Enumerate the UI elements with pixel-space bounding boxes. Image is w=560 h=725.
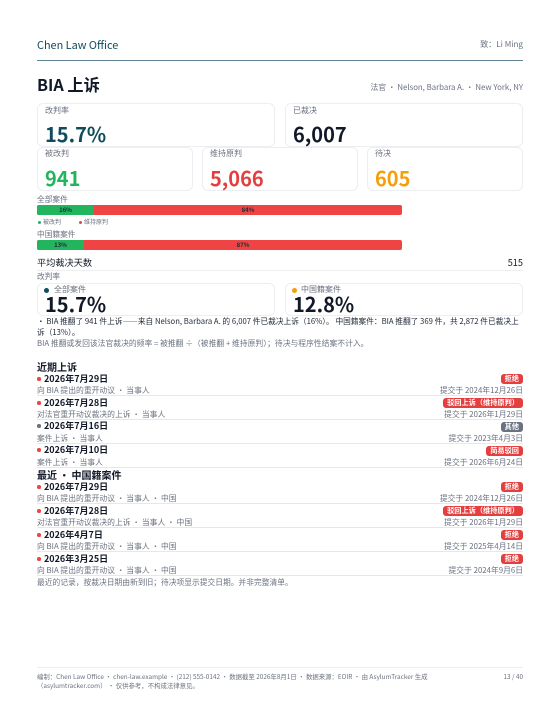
- average days row: 515: [508, 255, 523, 269]
- row: 提交于 2024年12月26日: [440, 493, 523, 504]
- row: 2026年7月10日: [44, 443, 108, 456]
- row: 拒绝: [505, 554, 519, 564]
- card: decided: [285, 103, 523, 147]
- row: 提交于 2025年4月14日: [444, 541, 523, 552]
- row: 提交于 2023年4月3日: [448, 433, 523, 444]
- legend: 维持原判: [84, 217, 108, 226]
- card: decided: 已裁决: [293, 105, 317, 116]
- card: reversal rate: 改判率: [45, 105, 69, 116]
- card: reversed: 被改判: [45, 148, 69, 159]
- comparison card: all cases: 全部案件: [54, 284, 86, 295]
- comparison card: China cases: 中国籍案件: [301, 284, 341, 295]
- average days row: 平均裁决天数: [37, 255, 92, 269]
- stacked bar: all cases: 16%: [59, 205, 72, 214]
- stacked bar: all cases: 84%: [242, 205, 254, 214]
- legend: [38, 217, 108, 226]
- card: decided: 6,007: [293, 118, 347, 148]
- card: affirmed: 维持原判: [210, 148, 242, 159]
- header: firm name: Chen Law Office: [37, 37, 118, 53]
- row: 向 BIA 提出的重开动议 · 当事人 · 中国: [37, 565, 177, 576]
- stacked bar: China cases: 87%: [237, 240, 249, 249]
- row: [37, 445, 523, 468]
- card: affirmed: 5,066: [210, 162, 264, 192]
- row: 对法官重开动议裁决的上诉 · 当事人 · 中国: [37, 517, 192, 528]
- summary text: • BIA 推翻了 941 件上诉——来自 Nelson, Barbara A. 的 6,007 件已裁决上诉（16%）。 中国籍案件：BIA 推翻了 369 件，共 2,872 件已裁决上诉（13%）。: [37, 316, 519, 338]
- comparison card: China cases: 12.8%: [293, 288, 354, 318]
- label: reversal rate: 改判率: [37, 271, 60, 282]
- label: China cases bar: 中国籍案件: [37, 229, 75, 240]
- card: reversed: [37, 147, 193, 191]
- row: 2026年3月25日: [44, 552, 108, 565]
- card: affirmed: [202, 147, 358, 191]
- legend: 被改判: [43, 217, 61, 226]
- average days row: [37, 255, 523, 271]
- row: 向 BIA 提出的重开动议 · 当事人 · 中国: [37, 541, 177, 552]
- footer text: 编制：Chen Law Office · chen-law.example · (212) 555-0142 · 数据截至 2026年8月1日 · 数据来源：EOIR · 由 AsylumTracker 生成（asylumtracker.com） · 仅供参考，不构成法律意见。: [37, 672, 428, 690]
- row: [37, 398, 523, 420]
- header: recipient: 致：Li Ming: [480, 39, 523, 50]
- row: 2026年7月29日: [44, 480, 108, 493]
- caption: 最近的记录，按裁决日期由新到旧；待决项显示提交日期。并非完整清单。: [37, 577, 293, 588]
- row: 2026年7月16日: [44, 419, 108, 432]
- row: 拒绝: [505, 530, 519, 540]
- row: 案件上诉 · 当事人: [37, 457, 103, 468]
- row: 提交于 2024年9月6日: [448, 565, 523, 576]
- row: 拒绝: [505, 482, 519, 492]
- label: all cases bar: 全部案件: [37, 194, 68, 205]
- row: [37, 374, 523, 396]
- row: 提交于 2026年1月29日: [444, 517, 523, 528]
- title: BIA 上诉: [37, 72, 100, 96]
- row: [37, 530, 523, 552]
- row: [37, 554, 523, 576]
- row: 拒绝: [505, 374, 519, 384]
- method note: BIA 推翻或发回该法官裁决的频率 = 被推翻 ÷（被推翻 + 维持原判）；待决与程序性结案不计入。: [37, 338, 368, 349]
- row: 提交于 2024年12月26日: [440, 385, 523, 396]
- comparison card: all cases: 15.7%: [45, 288, 106, 318]
- heading: recent China cases: 最近 · 中国籍案件: [37, 467, 122, 482]
- card: pending: 605: [375, 162, 410, 192]
- row: 驳回上诉（维持原判）: [447, 398, 519, 408]
- stacked bar: China cases: [37, 240, 402, 250]
- row: 提交于 2026年1月29日: [444, 409, 523, 420]
- card: pending: 待决: [375, 148, 391, 159]
- row: [37, 421, 523, 444]
- card: reversal rate: [37, 103, 275, 147]
- row: 案件上诉 · 当事人: [37, 433, 103, 444]
- row: 2026年7月29日: [44, 372, 108, 385]
- card: reversal rate: 15.7%: [45, 118, 106, 148]
- stacked bar: China cases: 13%: [54, 240, 67, 249]
- card: pending: [367, 147, 523, 191]
- row: 对法官重开动议裁决的上诉 · 当事人: [37, 409, 165, 420]
- row: [37, 482, 523, 504]
- row: 简易驳回: [490, 446, 519, 456]
- row: 其他: [505, 422, 519, 432]
- stacked bar: all cases: [37, 205, 402, 215]
- row: 2026年4月7日: [44, 528, 103, 541]
- row: 向 BIA 提出的重开动议 · 当事人 · 中国: [37, 493, 177, 504]
- comparison card: China cases: [285, 283, 523, 316]
- row: 提交于 2026年6月24日: [444, 457, 523, 468]
- card: reversed: 941: [45, 162, 80, 192]
- row: 2026年7月28日: [44, 504, 108, 517]
- row: 驳回上诉（维持原判）: [447, 506, 519, 516]
- heading: recent appeals: 近期上诉: [37, 359, 77, 374]
- judge meta line: 法官 · Nelson, Barbara A. · New York, NY: [370, 82, 523, 93]
- row: 2026年7月28日: [44, 396, 108, 409]
- comparison card: all cases: [37, 283, 275, 316]
- row: 向 BIA 提出的重开动议 · 当事人: [37, 385, 150, 396]
- row: [37, 506, 523, 528]
- page number: 13 / 40: [503, 672, 523, 681]
